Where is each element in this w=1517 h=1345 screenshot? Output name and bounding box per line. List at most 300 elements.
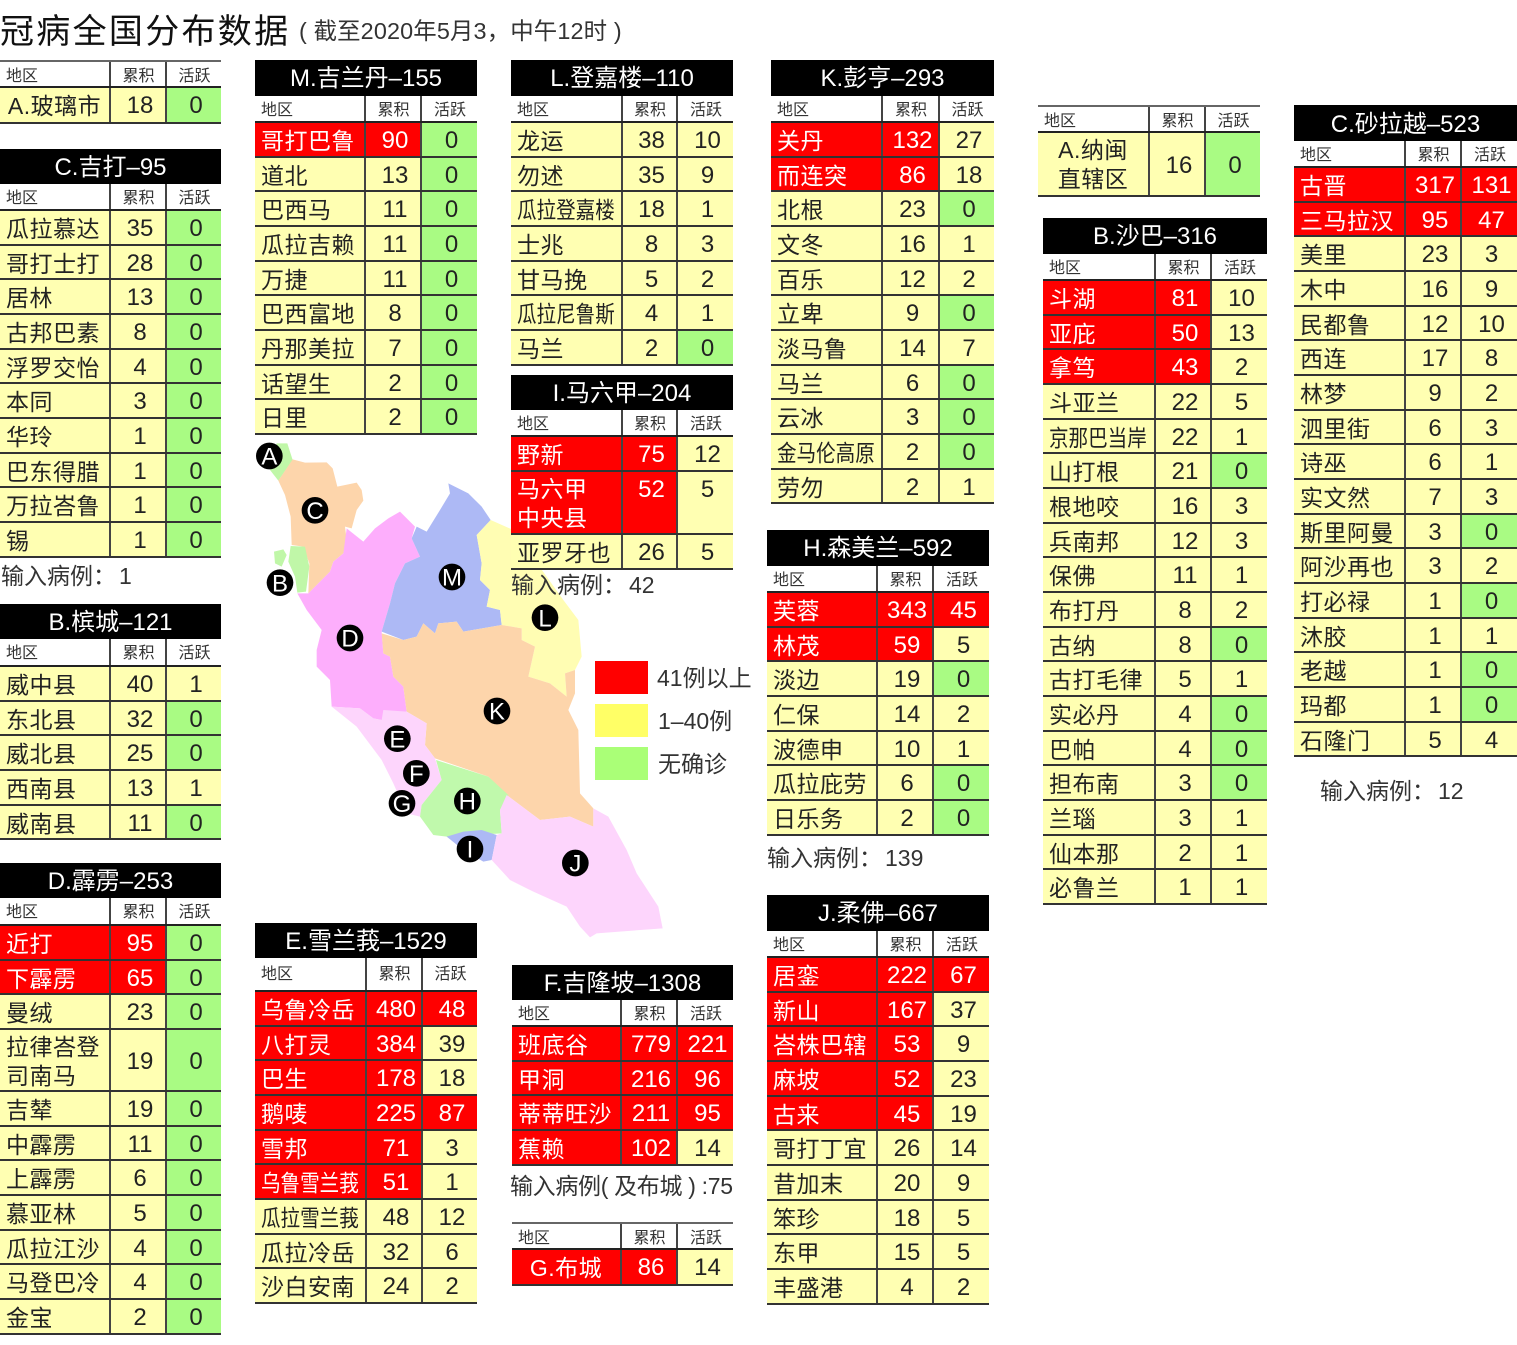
table rows (0, 211, 221, 558)
table rows: 9 (1428, 380, 1442, 407)
panel: A 玻璃市: 活跃 (178, 68, 210, 85)
legend: red swatch (595, 661, 648, 694)
heading: L.登嘉楼–110 (550, 65, 694, 92)
panel: E 雪兰莪 (255, 923, 477, 1304)
table rows: 0 (445, 404, 458, 431)
table rows: 19 (950, 1101, 977, 1128)
table header (771, 96, 994, 123)
table header (512, 1222, 733, 1250)
table rows: 5 (1178, 666, 1192, 693)
table rows: 3 (1428, 519, 1442, 546)
table rows: 0 (1235, 701, 1248, 728)
table rows: 曼绒 (6, 1000, 53, 1026)
table rows: 132 (892, 127, 933, 154)
table header (512, 1000, 733, 1027)
map markers: I (467, 837, 473, 864)
note: imported cases Negeri Sembilan: 输入病例：139 (767, 839, 923, 873)
table rows: 0 (962, 404, 976, 431)
table rows: 而连突 (777, 163, 848, 189)
table rows: 4 (133, 354, 147, 381)
table header: 累积 (378, 966, 410, 983)
table rows: 司南马 (6, 1063, 76, 1089)
table rows: 0 (189, 965, 203, 992)
table rows: 0 (189, 999, 203, 1026)
table rows: 居林 (6, 285, 53, 311)
table rows: 威南县 (6, 811, 76, 837)
table rows (511, 437, 733, 570)
panel: C 砂拉越 (1294, 105, 1517, 757)
table header: 地区 (518, 1006, 550, 1023)
table rows: 131 (1471, 172, 1512, 199)
table rows: 林梦 (1300, 381, 1347, 407)
table rows: 0 (445, 231, 458, 258)
table rows: 9 (906, 300, 919, 327)
table rows: 阿沙再也 (1300, 554, 1394, 580)
region E (332, 707, 442, 817)
map markers: C (306, 498, 324, 525)
table rows: 哥打士打 (6, 251, 100, 277)
table rows: 225 (376, 1100, 416, 1127)
table rows: 71 (383, 1135, 409, 1162)
table rows: 0 (445, 300, 458, 327)
note: imported cases Sarawak: 输入病例：12 (1320, 772, 1464, 806)
table header: 累积 (895, 102, 927, 119)
table header: 地区 (6, 190, 38, 207)
map of Peninsular Malaysia (256, 442, 662, 938)
table rows: 0 (189, 1048, 203, 1075)
table rows: 甘马挽 (517, 267, 588, 293)
table rows: 19 (127, 1096, 153, 1123)
table rows: 221 (687, 1031, 728, 1058)
table rows: 1 (1485, 623, 1498, 650)
table rows: 诗巫 (1300, 450, 1347, 476)
table rows: 金宝 (6, 1305, 53, 1331)
panel: B 沙巴 (1043, 218, 1267, 905)
heading (255, 923, 477, 958)
table rows: 343 (887, 597, 927, 624)
region D (297, 512, 420, 720)
table rows: 文冬 (777, 232, 824, 258)
table rows: 5 (1428, 727, 1442, 754)
table rows: 167 (887, 997, 927, 1024)
table rows: 中央县 (517, 504, 588, 530)
table rows: 32 (383, 1239, 409, 1266)
table rows: 26 (894, 1135, 920, 1162)
table header: 累积 (634, 416, 666, 433)
table rows: 1 (1428, 657, 1442, 684)
table rows: 三马拉汉 (1300, 208, 1394, 234)
panel: A 玻璃市: 18 (127, 92, 153, 119)
table rows: 9 (701, 162, 714, 189)
table rows: 2 (900, 805, 914, 832)
table rows: 16 (1172, 493, 1198, 520)
table rows: 笨珍 (773, 1206, 820, 1232)
table rows: 5 (645, 266, 658, 293)
table rows: 西南县 (6, 776, 76, 802)
map markers: J (569, 851, 581, 878)
table header: 活跃 (1217, 113, 1250, 130)
table rows: 779 (631, 1031, 671, 1058)
table rows: 林茂 (773, 633, 820, 659)
table header: 地区 (261, 966, 293, 983)
table rows: 45 (894, 1101, 920, 1128)
table rows: 1 (133, 423, 147, 450)
table rows: 民都鲁 (1300, 312, 1370, 338)
table rows: 瓜拉吉赖 (261, 232, 355, 258)
table rows: 0 (189, 527, 203, 554)
table rows: 18 (439, 1065, 465, 1092)
table header (511, 96, 733, 123)
table rows: 2 (957, 1274, 970, 1301)
table rows: 0 (189, 388, 203, 415)
table header: 累积 (633, 1006, 666, 1023)
table rows: 昔加末 (773, 1171, 844, 1197)
legend: green label: 无确诊 (658, 751, 727, 777)
table rows: 0 (189, 423, 203, 450)
panel: M 吉兰丹 (255, 60, 477, 435)
table rows: 居銮 (773, 963, 820, 989)
table rows: 华玲 (6, 424, 53, 450)
table rows: 0 (189, 1235, 203, 1262)
map markers: M (442, 565, 462, 592)
table rows: 直辖区 (1058, 166, 1128, 192)
table rows: 0 (189, 354, 203, 381)
table rows: 1 (1428, 588, 1442, 615)
region I (447, 830, 497, 862)
table rows: 巴西富地 (261, 301, 355, 327)
table rows: 2 (445, 1273, 459, 1300)
heading (0, 149, 221, 184)
panel: A 玻璃市: 地区 (6, 68, 38, 85)
table rows: 53 (894, 1031, 920, 1058)
table rows: 0 (189, 319, 203, 346)
table rows: 3 (701, 231, 714, 258)
table rows: 0 (189, 706, 203, 733)
table rows: 7 (1428, 484, 1442, 511)
table rows: 2 (957, 701, 970, 728)
table rows: 0 (445, 335, 458, 362)
table rows: 2 (1235, 354, 1248, 381)
table rows: 哥打丁宜 (773, 1136, 867, 1162)
table rows: 21 (1172, 458, 1198, 485)
table rows: 5 (957, 1205, 970, 1232)
table header: 累积 (1161, 113, 1194, 130)
table rows: 0 (189, 250, 203, 277)
table rows (512, 1250, 733, 1286)
table rows: 八打灵 (261, 1032, 332, 1058)
table rows: 8 (1485, 345, 1498, 372)
table rows: 道北 (261, 163, 308, 189)
table rows: 玛都 (1300, 693, 1347, 719)
table rows: 1 (1178, 874, 1192, 901)
table rows: 巴生 (261, 1066, 308, 1092)
table rows: 1 (1235, 874, 1248, 901)
table rows: 日乐务 (773, 806, 844, 832)
table rows: 万捷 (261, 267, 308, 293)
table rows: 古纳 (1049, 633, 1096, 659)
table header: 活跃 (1224, 260, 1256, 277)
table rows: 泗里街 (1300, 416, 1370, 442)
map markers: L (538, 605, 552, 632)
table rows: 216 (631, 1066, 671, 1093)
table rows: 芙蓉 (773, 598, 820, 624)
table rows: 鹅唛 (261, 1101, 308, 1127)
table rows: 8 (1178, 632, 1192, 659)
table rows: 布打丹 (1049, 598, 1120, 624)
title: 冠病全国分布数据 (0, 13, 290, 51)
table rows: 6 (900, 770, 914, 797)
table rows: 0 (957, 805, 970, 832)
table rows: 马六甲 (517, 476, 588, 502)
table rows: 关丹 (777, 128, 824, 154)
map markers: B (272, 570, 288, 597)
heading: M.吉兰丹–155 (290, 65, 442, 92)
table rows: 6 (1428, 449, 1442, 476)
table rows: 雪邦 (261, 1136, 308, 1162)
table rows: 10 (1228, 285, 1255, 312)
table rows: 巴西马 (261, 197, 332, 223)
table header: 地区 (1049, 260, 1081, 277)
table rows: 11 (383, 231, 407, 258)
panel: J 柔佛 (767, 895, 989, 1305)
table rows (767, 958, 989, 1305)
table rows: 3 (1485, 241, 1498, 268)
table header: 活跃 (434, 966, 466, 983)
table rows: 0 (189, 1200, 203, 1227)
panel: I 马六甲 (511, 375, 733, 570)
table rows: 20 (894, 1170, 920, 1197)
table rows: 6 (445, 1239, 459, 1266)
map markers (256, 443, 589, 878)
table rows (255, 123, 477, 435)
table rows: 古来 (773, 1102, 820, 1128)
table header: 地区 (773, 572, 805, 589)
table header: 累积 (634, 102, 666, 119)
table rows: 沙白安南 (261, 1274, 355, 1300)
table rows: 1 (1235, 840, 1248, 867)
region K (382, 622, 593, 827)
note: imported cases Kedah: 输入病例：1 (1, 557, 132, 591)
table rows: 0 (962, 439, 976, 466)
table header: 累积 (1167, 260, 1200, 277)
table rows: 京那巴当岸 (1049, 425, 1147, 451)
table rows: 12 (899, 266, 926, 293)
table rows: 8 (645, 231, 658, 258)
table rows: 2 (1485, 380, 1498, 407)
table rows: 0 (189, 930, 203, 957)
table rows: 95 (1422, 207, 1448, 234)
table rows: 75 (638, 441, 665, 468)
table rows: 亚庇 (1049, 321, 1096, 347)
table rows: 39 (439, 1031, 465, 1058)
table header: 累积 (122, 190, 154, 207)
panel: F 吉隆坡 (512, 965, 733, 1166)
table rows: 19 (127, 1048, 153, 1075)
table rows: 1 (1428, 623, 1442, 650)
heading (767, 530, 989, 566)
table rows: 锡 (6, 528, 30, 554)
table rows: 1 (1235, 805, 1248, 832)
table rows: 0 (957, 666, 970, 693)
table rows: 16 (1166, 152, 1192, 179)
legend: red label: 41例以上 (657, 665, 752, 691)
table rows: 本同 (6, 389, 53, 415)
table header: 累积 (377, 102, 410, 119)
table rows: 士兆 (517, 232, 564, 258)
table rows: 1 (1235, 666, 1248, 693)
table rows: 北根 (777, 197, 824, 223)
table rows: 52 (638, 476, 665, 503)
table rows: 1 (1235, 424, 1248, 451)
table rows: 1 (701, 300, 714, 327)
table rows: 必鲁兰 (1049, 875, 1120, 901)
table rows: 斯里阿曼 (1300, 520, 1394, 546)
table rows: 0 (962, 370, 976, 397)
table rows: 丰盛港 (773, 1275, 844, 1301)
table rows: 102 (631, 1135, 671, 1162)
table rows: 兰瑙 (1049, 806, 1096, 832)
table header: 活跃 (690, 1006, 722, 1023)
table rows: 9 (957, 1031, 970, 1058)
table rows: 2 (1178, 840, 1192, 867)
table rows: 45 (950, 597, 977, 624)
table rows: 25 (127, 740, 153, 767)
table rows: 0 (1228, 152, 1242, 179)
table rows: 23 (1422, 241, 1448, 268)
table header (0, 639, 221, 667)
table rows: 1 (133, 492, 147, 519)
table rows: 实必丹 (1049, 702, 1120, 728)
table rows: 95 (694, 1100, 721, 1127)
table rows: 14 (950, 1135, 977, 1162)
table rows: 龙运 (517, 128, 564, 154)
panel: A 玻璃市: 0 (189, 92, 203, 119)
table rows: 18 (956, 162, 982, 189)
table rows: 211 (632, 1100, 670, 1127)
table rows: 14 (899, 335, 926, 362)
table rows: 86 (899, 162, 926, 189)
table rows: 2 (1235, 597, 1248, 624)
region J (492, 795, 663, 937)
table rows: 3 (133, 388, 147, 415)
table header (767, 931, 989, 958)
table rows: 瓜拉雪兰莪 (261, 1205, 359, 1231)
table rows: 2 (388, 404, 402, 431)
table rows: 11 (128, 810, 152, 837)
heading: C.砂拉越–523 (1331, 111, 1480, 138)
panel: A 纳闽 (1038, 105, 1260, 197)
table rows: 35 (127, 215, 153, 242)
heading: C.吉打–95 (54, 154, 167, 181)
table rows: 5 (957, 1239, 970, 1266)
table rows: 马兰 (517, 336, 564, 362)
heading (771, 60, 994, 96)
heading: E.雪兰莪–1529 (285, 928, 447, 955)
table rows: 37 (950, 997, 977, 1024)
panel: A 玻璃市: 累积 (122, 68, 154, 85)
table rows: 金马伦高原 (777, 440, 875, 466)
table rows: 13 (127, 284, 153, 311)
table rows: 斗亚兰 (1049, 390, 1120, 416)
table rows: 5 (957, 632, 970, 659)
table rows: 12 (1172, 528, 1198, 555)
heading (0, 863, 221, 898)
table header: 地区 (6, 904, 38, 921)
table rows: 12 (1422, 311, 1448, 338)
table rows: 86 (638, 1254, 664, 1281)
table rows: 7 (388, 335, 402, 362)
table rows: 95 (127, 930, 153, 957)
table rows: 立卑 (777, 301, 824, 327)
table rows: 24 (383, 1273, 409, 1300)
table rows: 480 (376, 996, 416, 1023)
table rows: 0 (957, 770, 970, 797)
region B (274, 546, 309, 593)
table rows: 11 (1173, 562, 1197, 589)
table header: 活跃 (178, 645, 210, 662)
table rows: 222 (887, 962, 927, 989)
table rows: 沐胶 (1300, 624, 1347, 650)
table rows: 0 (701, 335, 714, 362)
table rows: 威北县 (6, 741, 76, 767)
table rows: 近打 (6, 931, 53, 957)
legend: yellow label: 1–40例 (658, 708, 732, 734)
heading (1043, 218, 1267, 254)
panel: D 霹雳 (0, 863, 221, 1335)
table header: 活跃 (178, 904, 210, 921)
table rows: 0 (1235, 632, 1248, 659)
heading (511, 60, 733, 96)
table rows: 35 (638, 162, 665, 189)
heading (1294, 105, 1517, 141)
table rows: 0 (445, 370, 458, 397)
panel: L 登嘉楼 (511, 60, 733, 366)
table rows: 巴帕 (1049, 737, 1096, 763)
legend: green swatch (595, 747, 648, 780)
table rows: 3 (1485, 415, 1498, 442)
table rows: 5 (701, 476, 714, 503)
heading (255, 60, 477, 96)
table rows: 0 (1235, 736, 1248, 763)
table rows: 瓜拉江沙 (6, 1236, 100, 1262)
map markers: D (341, 626, 359, 653)
table header: 地区 (6, 645, 38, 662)
table rows: 17 (1422, 345, 1448, 372)
table rows: 3 (906, 404, 919, 431)
table rows: 27 (956, 127, 982, 154)
heading: J.柔佛–667 (818, 900, 938, 927)
table rows: 384 (376, 1031, 416, 1058)
table rows (511, 123, 733, 366)
table rows: 1 (1235, 562, 1248, 589)
table rows (0, 926, 221, 1335)
table rows: 0 (189, 1165, 203, 1192)
table rows: 28 (127, 250, 153, 277)
table rows: 上霹雳 (6, 1166, 76, 1192)
subtitle: date: ( 截至2020年5月3，中午12时 ) (299, 12, 622, 46)
region L (477, 520, 582, 697)
panel: G 布城 (512, 1222, 733, 1286)
table header: 地区 (777, 102, 809, 119)
table rows: 12 (694, 441, 721, 468)
table header: 累积 (122, 904, 154, 921)
heading (0, 604, 221, 639)
table rows: 4 (900, 1274, 914, 1301)
table header (255, 958, 477, 992)
table rows: 5 (133, 1200, 147, 1227)
table rows: 淡边 (773, 667, 820, 693)
table rows (0, 667, 221, 840)
